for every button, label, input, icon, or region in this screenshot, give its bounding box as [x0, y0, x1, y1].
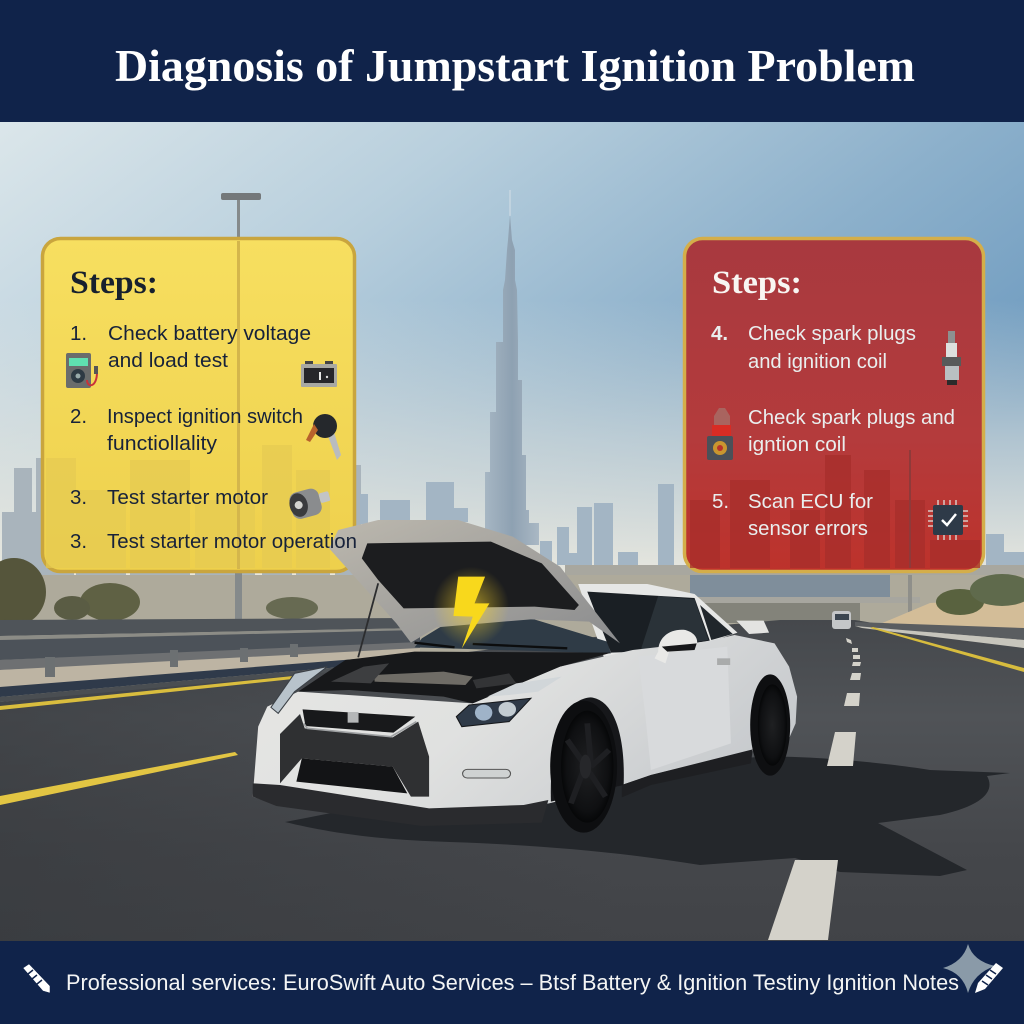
panel: yellow steps backing: [42, 238, 354, 572]
red heading: Steps:: [712, 265, 802, 301]
step 3: 3.: [70, 486, 87, 509]
car grille mesh: [296, 758, 407, 793]
step 3: Test starter motor: [107, 486, 268, 509]
lightning bolt: [433, 567, 509, 648]
car door handle: [717, 658, 730, 665]
title text: Diagnosis of Jumpstart Ignition Problem: [115, 40, 915, 91]
step 1: 1.: [70, 322, 87, 345]
step 5: [712, 490, 873, 540]
step 3 repeated: 3.: [70, 530, 87, 553]
left guardrail: [0, 618, 420, 702]
Burj tower: [485, 190, 539, 545]
car: [253, 520, 797, 833]
street lamp left: [221, 193, 261, 622]
car rear spoiler: [736, 621, 769, 634]
step 1: Check battery voltage: [108, 322, 311, 345]
car badge: [348, 712, 359, 723]
step 5: 5.: [712, 490, 729, 513]
car engine bay: [298, 652, 612, 703]
car lower front bumper: [280, 714, 429, 797]
car windshield and windows: [415, 592, 733, 653]
step 4: and ignition coil: [748, 350, 887, 373]
car rear wheel: [750, 674, 790, 776]
roadside vegetation: [0, 558, 1024, 632]
icon: car battery: [301, 361, 337, 387]
footer text: Professional services: EuroSwift Auto Services – Btsf Battery & Ignition Testiny Ignition Notes: [66, 970, 959, 995]
repeated spark plug step: [748, 406, 955, 456]
step 4: 4.: [711, 322, 728, 345]
icon: red lock coil: [707, 408, 733, 460]
yellow heading: Steps:: [70, 265, 158, 301]
car roof: [578, 584, 737, 657]
car door shading: [638, 647, 731, 770]
icon: ECU chip: [928, 500, 968, 540]
background: sky: [0, 122, 1024, 582]
panel: red steps backing: [684, 238, 984, 572]
icon: multimeter: [66, 353, 98, 388]
background: city skyline: [2, 190, 1024, 580]
title banner: [0, 0, 1024, 122]
road surface: [0, 620, 1024, 945]
repeated spark plug step: igntion coil: [748, 433, 846, 456]
icon: starter motor: [287, 484, 333, 521]
car front wheel: [550, 697, 624, 833]
car right headlight: [456, 677, 562, 727]
step 2: functiollality: [107, 432, 218, 455]
icon: ignition key: [306, 414, 341, 460]
hood prop rod: [358, 583, 378, 657]
car chrome trim: [304, 722, 416, 737]
step 1: [70, 322, 311, 372]
panel: red steps text: [711, 265, 955, 540]
background ground strip: [0, 575, 1024, 705]
car upper grille: [303, 709, 415, 733]
step 3 repeated: Test starter motor operation: [107, 530, 357, 553]
wipers: [415, 643, 567, 648]
distant car: [832, 611, 851, 629]
step 2: Inspect ignition switch: [107, 405, 303, 428]
step 2: 2.: [70, 405, 87, 428]
right guardrail: [855, 622, 1024, 648]
car left headlight: [271, 667, 327, 713]
icon: right pencil: [975, 963, 1003, 993]
step 2: [70, 405, 303, 455]
road markings: [0, 627, 1024, 940]
car shadow: [285, 757, 1010, 876]
repeated spark plug step: Check spark plugs and: [748, 406, 955, 429]
car body: [253, 635, 797, 825]
icon: spark plug: [942, 331, 961, 385]
footer sparkle: [943, 944, 995, 993]
elevated highway: [565, 565, 1024, 623]
panel: yellow steps text: [70, 265, 357, 553]
step 4: Check spark plugs: [748, 322, 916, 345]
step 5: Scan ECU for: [748, 490, 873, 513]
step 4: [711, 322, 916, 373]
car side skirt: [622, 749, 753, 797]
footer bar: [0, 941, 1024, 1024]
car splitter: [253, 783, 548, 826]
car fog light: [463, 769, 511, 778]
step 1: and load test: [108, 349, 228, 372]
car mirror: [655, 630, 697, 663]
step 5: sensor errors: [748, 517, 868, 540]
car open hood: [329, 520, 620, 643]
icon: left pencil: [23, 964, 50, 993]
